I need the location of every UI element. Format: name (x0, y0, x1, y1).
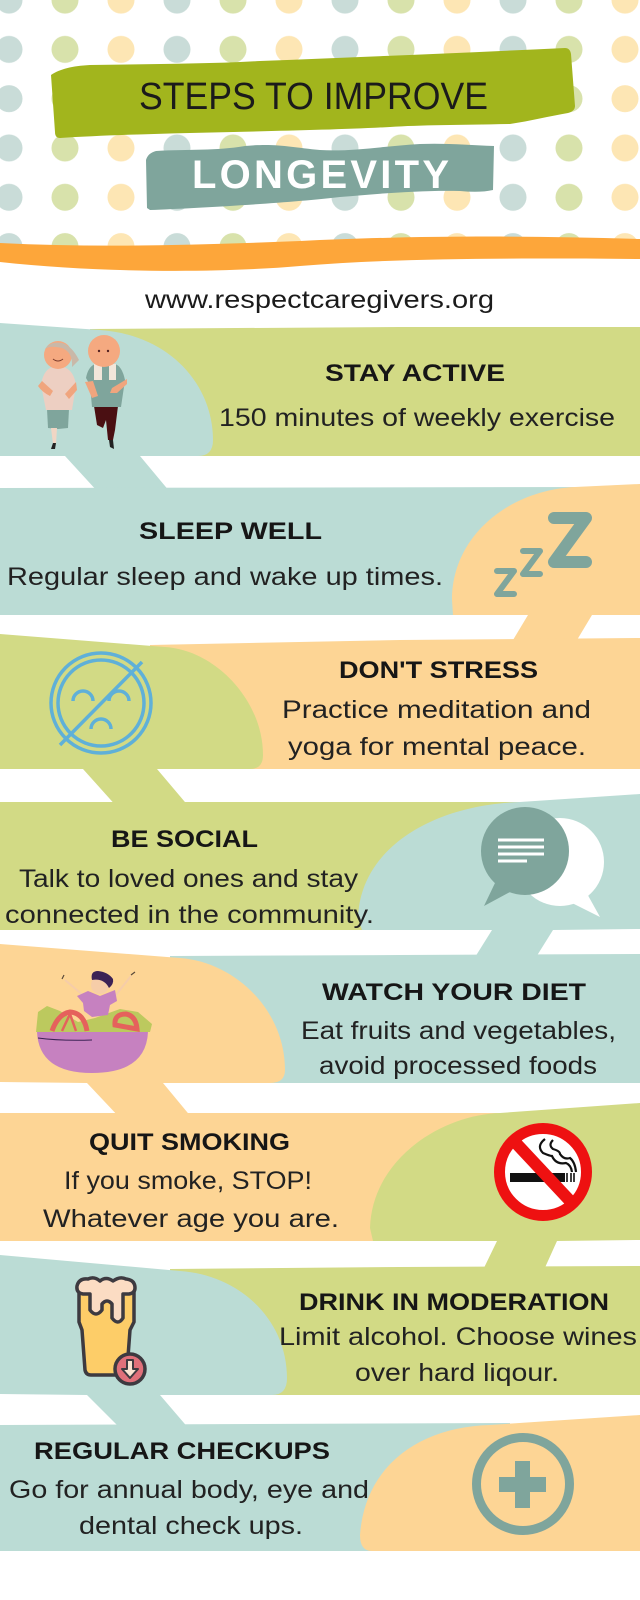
panel: drink in moderation: over hard liqour. (355, 1359, 559, 1387)
panel: quit smoking (0, 1103, 640, 1272)
panel: be social (0, 794, 640, 962)
panel: don't stress (0, 634, 640, 808)
subtitle band: longevity: LONGEVITY (192, 153, 449, 197)
text: Regular sleep and wake up times. (7, 563, 443, 591)
header polka dot background (0, 0, 640, 250)
panel: stay active (0, 323, 640, 492)
panel: sleep well (0, 484, 640, 645)
text: Practice meditation and (282, 696, 591, 724)
text: Go for annual body, eye and (9, 1476, 369, 1504)
text: Limit alcohol. Choose wines (279, 1323, 637, 1351)
heading: REGULAR CHECKUPS (34, 1438, 330, 1465)
website url: www.respectcaregivers.org (144, 286, 494, 314)
icon: elderly couple jogging (38, 335, 127, 449)
subtitle band: longevity (146, 144, 494, 210)
text: Talk to loved ones and stay (19, 865, 359, 893)
icon: person in salad bowl (36, 971, 152, 1073)
panel: don't stress: yoga for mental peace. (288, 733, 586, 761)
panel: be social: connected in the community. (5, 901, 374, 929)
panel: regular checkups (0, 1415, 640, 1551)
heading: QUIT SMOKING (89, 1129, 290, 1156)
icon: speech bubbles (481, 807, 604, 917)
text: 150 minutes of weekly exercise (219, 404, 615, 432)
icon: beer glass (77, 1278, 145, 1384)
heading: DON'T STRESS (339, 657, 538, 684)
text: If you smoke, STOP! (64, 1167, 312, 1195)
panel: regular checkups: dental check ups. (79, 1512, 303, 1540)
panel: watch your diet: avoid processed foods (319, 1052, 597, 1080)
heading: DRINK IN MODERATION (299, 1289, 609, 1316)
heading: WATCH YOUR DIET (322, 979, 586, 1006)
panel: quit smoking: Whatever age you are. (43, 1205, 339, 1233)
text: Eat fruits and vegetables, (301, 1017, 616, 1045)
icon: no stress face (51, 653, 151, 753)
heading: SLEEP WELL (139, 518, 322, 545)
heading: STAY ACTIVE (325, 360, 505, 387)
title band: steps to improve (51, 48, 575, 138)
icon: no smoking sign (500, 1128, 586, 1216)
heading: BE SOCIAL (111, 826, 258, 853)
orange wavy divider (0, 237, 640, 271)
icon: zzz (497, 518, 586, 594)
panel: drink in moderation (0, 1255, 640, 1430)
title band: steps to improve: STEPS TO IMPROVE (139, 76, 488, 118)
icon: medical cross in circle (476, 1438, 570, 1530)
panel: watch your diet (0, 944, 640, 1118)
